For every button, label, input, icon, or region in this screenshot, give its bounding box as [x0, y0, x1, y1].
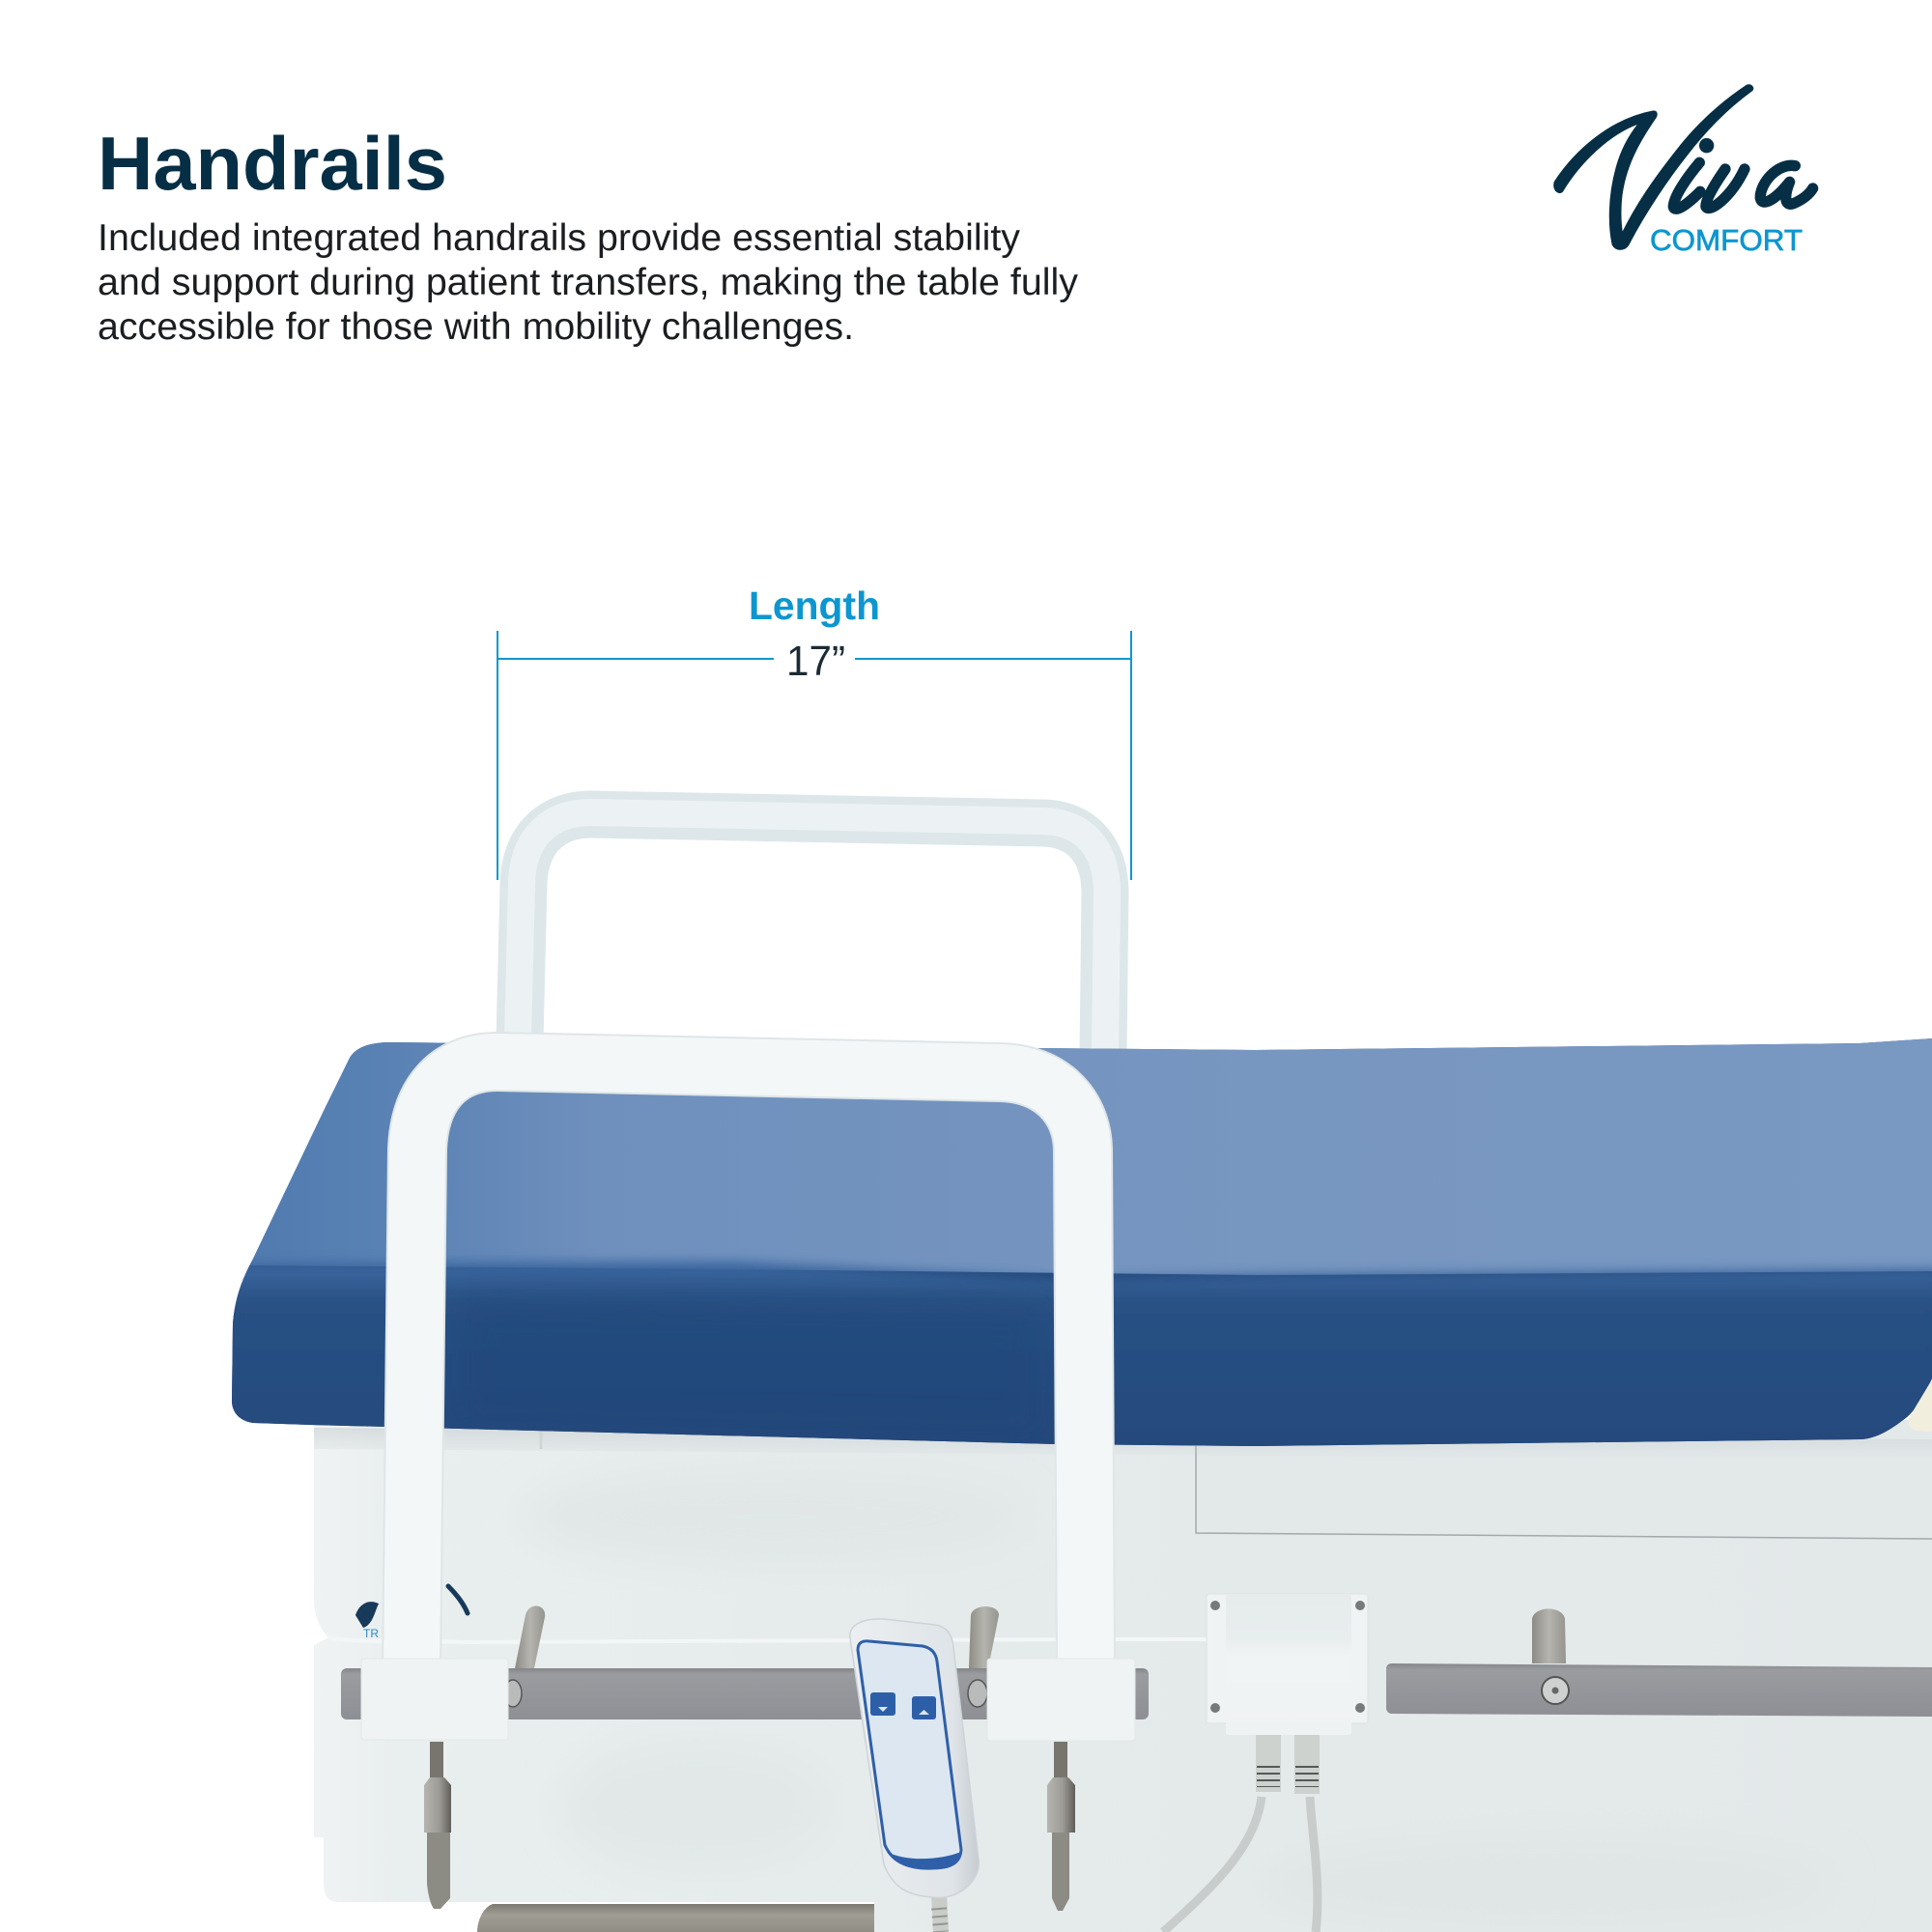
bolts and pins	[504, 1605, 1569, 1707]
description text: accessible for those with mobility challenges.	[98, 306, 854, 348]
junction box	[1207, 1594, 1368, 1735]
dimension lines	[497, 631, 1131, 880]
hand controller	[850, 1619, 979, 1932]
stand plate	[477, 1904, 874, 1932]
rail: left bar	[341, 1668, 1149, 1719]
left clamp rod	[424, 1742, 451, 1909]
back handrail	[518, 812, 1107, 1055]
controller up button	[912, 1696, 936, 1719]
left clamp bracket	[361, 1659, 508, 1740]
right clamp rod	[1047, 1742, 1075, 1911]
description text	[98, 217, 1079, 348]
front handrail	[412, 1062, 1086, 1671]
mattress front face	[222, 1262, 1932, 1459]
description text: Included integrated handrails provide essential stability	[98, 217, 1021, 259]
exam table photo illustration	[222, 812, 1932, 1932]
controller down button	[870, 1692, 895, 1716]
dimension value: 17”	[786, 638, 845, 685]
controller blue lower band	[887, 1852, 961, 1869]
partial logo decal on table	[355, 1586, 468, 1640]
partial logo decal on table: TR	[363, 1627, 379, 1640]
controller body	[850, 1619, 979, 1898]
table body base	[314, 1420, 1932, 1932]
dimension: length 17 inches	[497, 583, 1131, 880]
description text: and support during patient transfers, making the table fully	[98, 262, 1079, 303]
rail: right bar	[1386, 1663, 1932, 1717]
blue mattress	[222, 1024, 1932, 1459]
logo script: Viva	[1554, 85, 1813, 249]
logo: Viva Comfort	[1554, 85, 1813, 257]
mattress top surface	[222, 1024, 1932, 1275]
cream bolster end	[1908, 1379, 1932, 1432]
power cables	[1163, 1735, 1318, 1932]
title: Handrails	[98, 121, 447, 206]
right clamp bracket	[987, 1659, 1135, 1741]
controller cable	[939, 1893, 941, 1932]
controller face panel	[858, 1641, 961, 1868]
steel mounting rails	[341, 1605, 1932, 1719]
dimension label: Length: Length	[749, 583, 880, 628]
logo word: COMFORT: COMFORT	[1650, 223, 1803, 257]
